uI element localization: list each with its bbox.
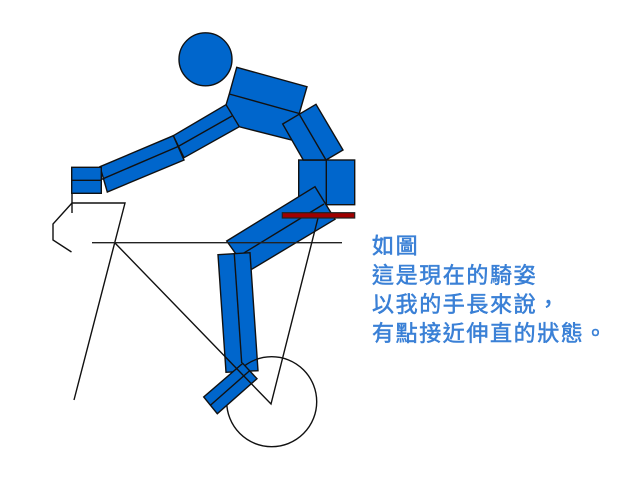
head [179,33,232,86]
saddle [282,213,355,218]
upper arm [173,105,239,158]
rider: cyclist body [72,33,355,372]
hips [299,160,355,205]
caption text: 如圖 [372,234,419,258]
thigh [227,187,335,269]
shin [218,253,258,372]
rear wheel [227,357,317,447]
caption text: 以我的手長來說， [372,292,561,317]
bicycle: handlebar and fork [53,193,125,400]
bicycle: top tube [92,242,342,244]
caption text: 有點接近伸直的狀態。 [372,321,608,346]
forearm [100,136,184,192]
upper arm near shoulder [283,104,343,160]
torso [226,67,307,140]
hand [72,167,101,193]
caption text: 這是現在的騎姿 [372,263,537,288]
bicycle: frame tubes [115,218,318,404]
foot [204,363,257,414]
caption text [372,234,608,346]
